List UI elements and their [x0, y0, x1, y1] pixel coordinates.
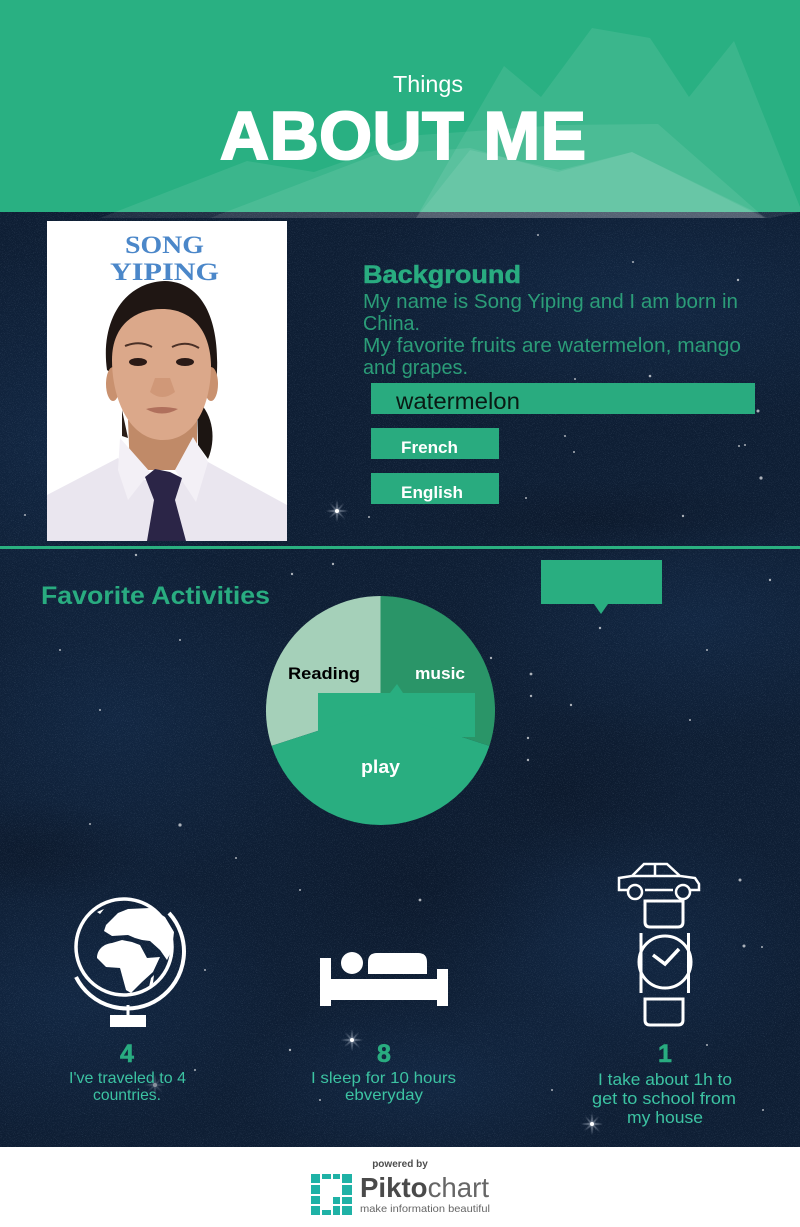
- favorite activities heading: Favorite Activities: [41, 582, 270, 610]
- icon: watch: [639, 901, 691, 1025]
- label: play: play: [361, 757, 400, 777]
- tagline: make information beautiful: [360, 1203, 490, 1215]
- background text: [363, 291, 741, 379]
- name on photo: SONG: [125, 232, 204, 259]
- stat: countries: I've traveled to 4: [69, 1070, 186, 1087]
- stat: commute: 1: [658, 1040, 672, 1068]
- background text: My name is Song Yiping and I am born in: [363, 291, 738, 313]
- portrait photo: [47, 221, 287, 541]
- stat: sleep: ebveryday: [345, 1087, 423, 1104]
- mountains: [100, 28, 800, 218]
- icon: bed: [320, 952, 448, 1006]
- stat: sleep: I sleep for 10 hours: [311, 1070, 456, 1087]
- stat: commute: [592, 1040, 736, 1127]
- name on photo: YIPING: [110, 259, 219, 286]
- background text: My favorite fruits are watermelon, mango: [363, 335, 741, 357]
- slice: play: [272, 710, 489, 825]
- background heading: Background: [363, 261, 521, 289]
- subtitle: Things: [393, 71, 463, 97]
- bar: French: French: [401, 438, 458, 457]
- name on photo: [110, 232, 219, 286]
- pie callout: [318, 684, 475, 737]
- stat: countries: [69, 1040, 186, 1104]
- bar: French: [371, 428, 499, 459]
- stat: commute: I take about 1h to: [598, 1070, 732, 1089]
- powered by: powered by: [372, 1159, 428, 1170]
- header band: [0, 0, 800, 218]
- stat: commute: my house: [627, 1108, 703, 1127]
- divider: [0, 546, 800, 549]
- empty callout: [541, 560, 662, 614]
- stat: countries: 4: [120, 1040, 134, 1068]
- stat: sleep: [311, 1040, 456, 1104]
- background text: China.: [363, 313, 420, 335]
- icon: car: [619, 864, 699, 899]
- stat: countries: countries.: [93, 1087, 161, 1104]
- bar: English: [371, 473, 499, 504]
- icon: globe: [76, 899, 184, 1027]
- background text: and grapes.: [363, 357, 468, 379]
- piktochart wordmark: Piktochart: [360, 1172, 489, 1203]
- bar: watermelon: [371, 383, 755, 414]
- stat: sleep: 8: [377, 1040, 391, 1068]
- bar: English: English: [401, 483, 463, 502]
- pie chart: [266, 596, 495, 825]
- stat: commute: get to school from: [592, 1089, 736, 1108]
- bar: watermelon: watermelon: [395, 388, 520, 414]
- footer: [0, 1147, 800, 1227]
- label: music: music: [415, 664, 465, 683]
- slice: music: [380, 596, 495, 746]
- label: reading: Reading: [288, 664, 360, 683]
- slice: reading: [266, 596, 380, 746]
- title: ABOUT ME: [220, 98, 586, 174]
- piktochart logo mark: [311, 1174, 352, 1215]
